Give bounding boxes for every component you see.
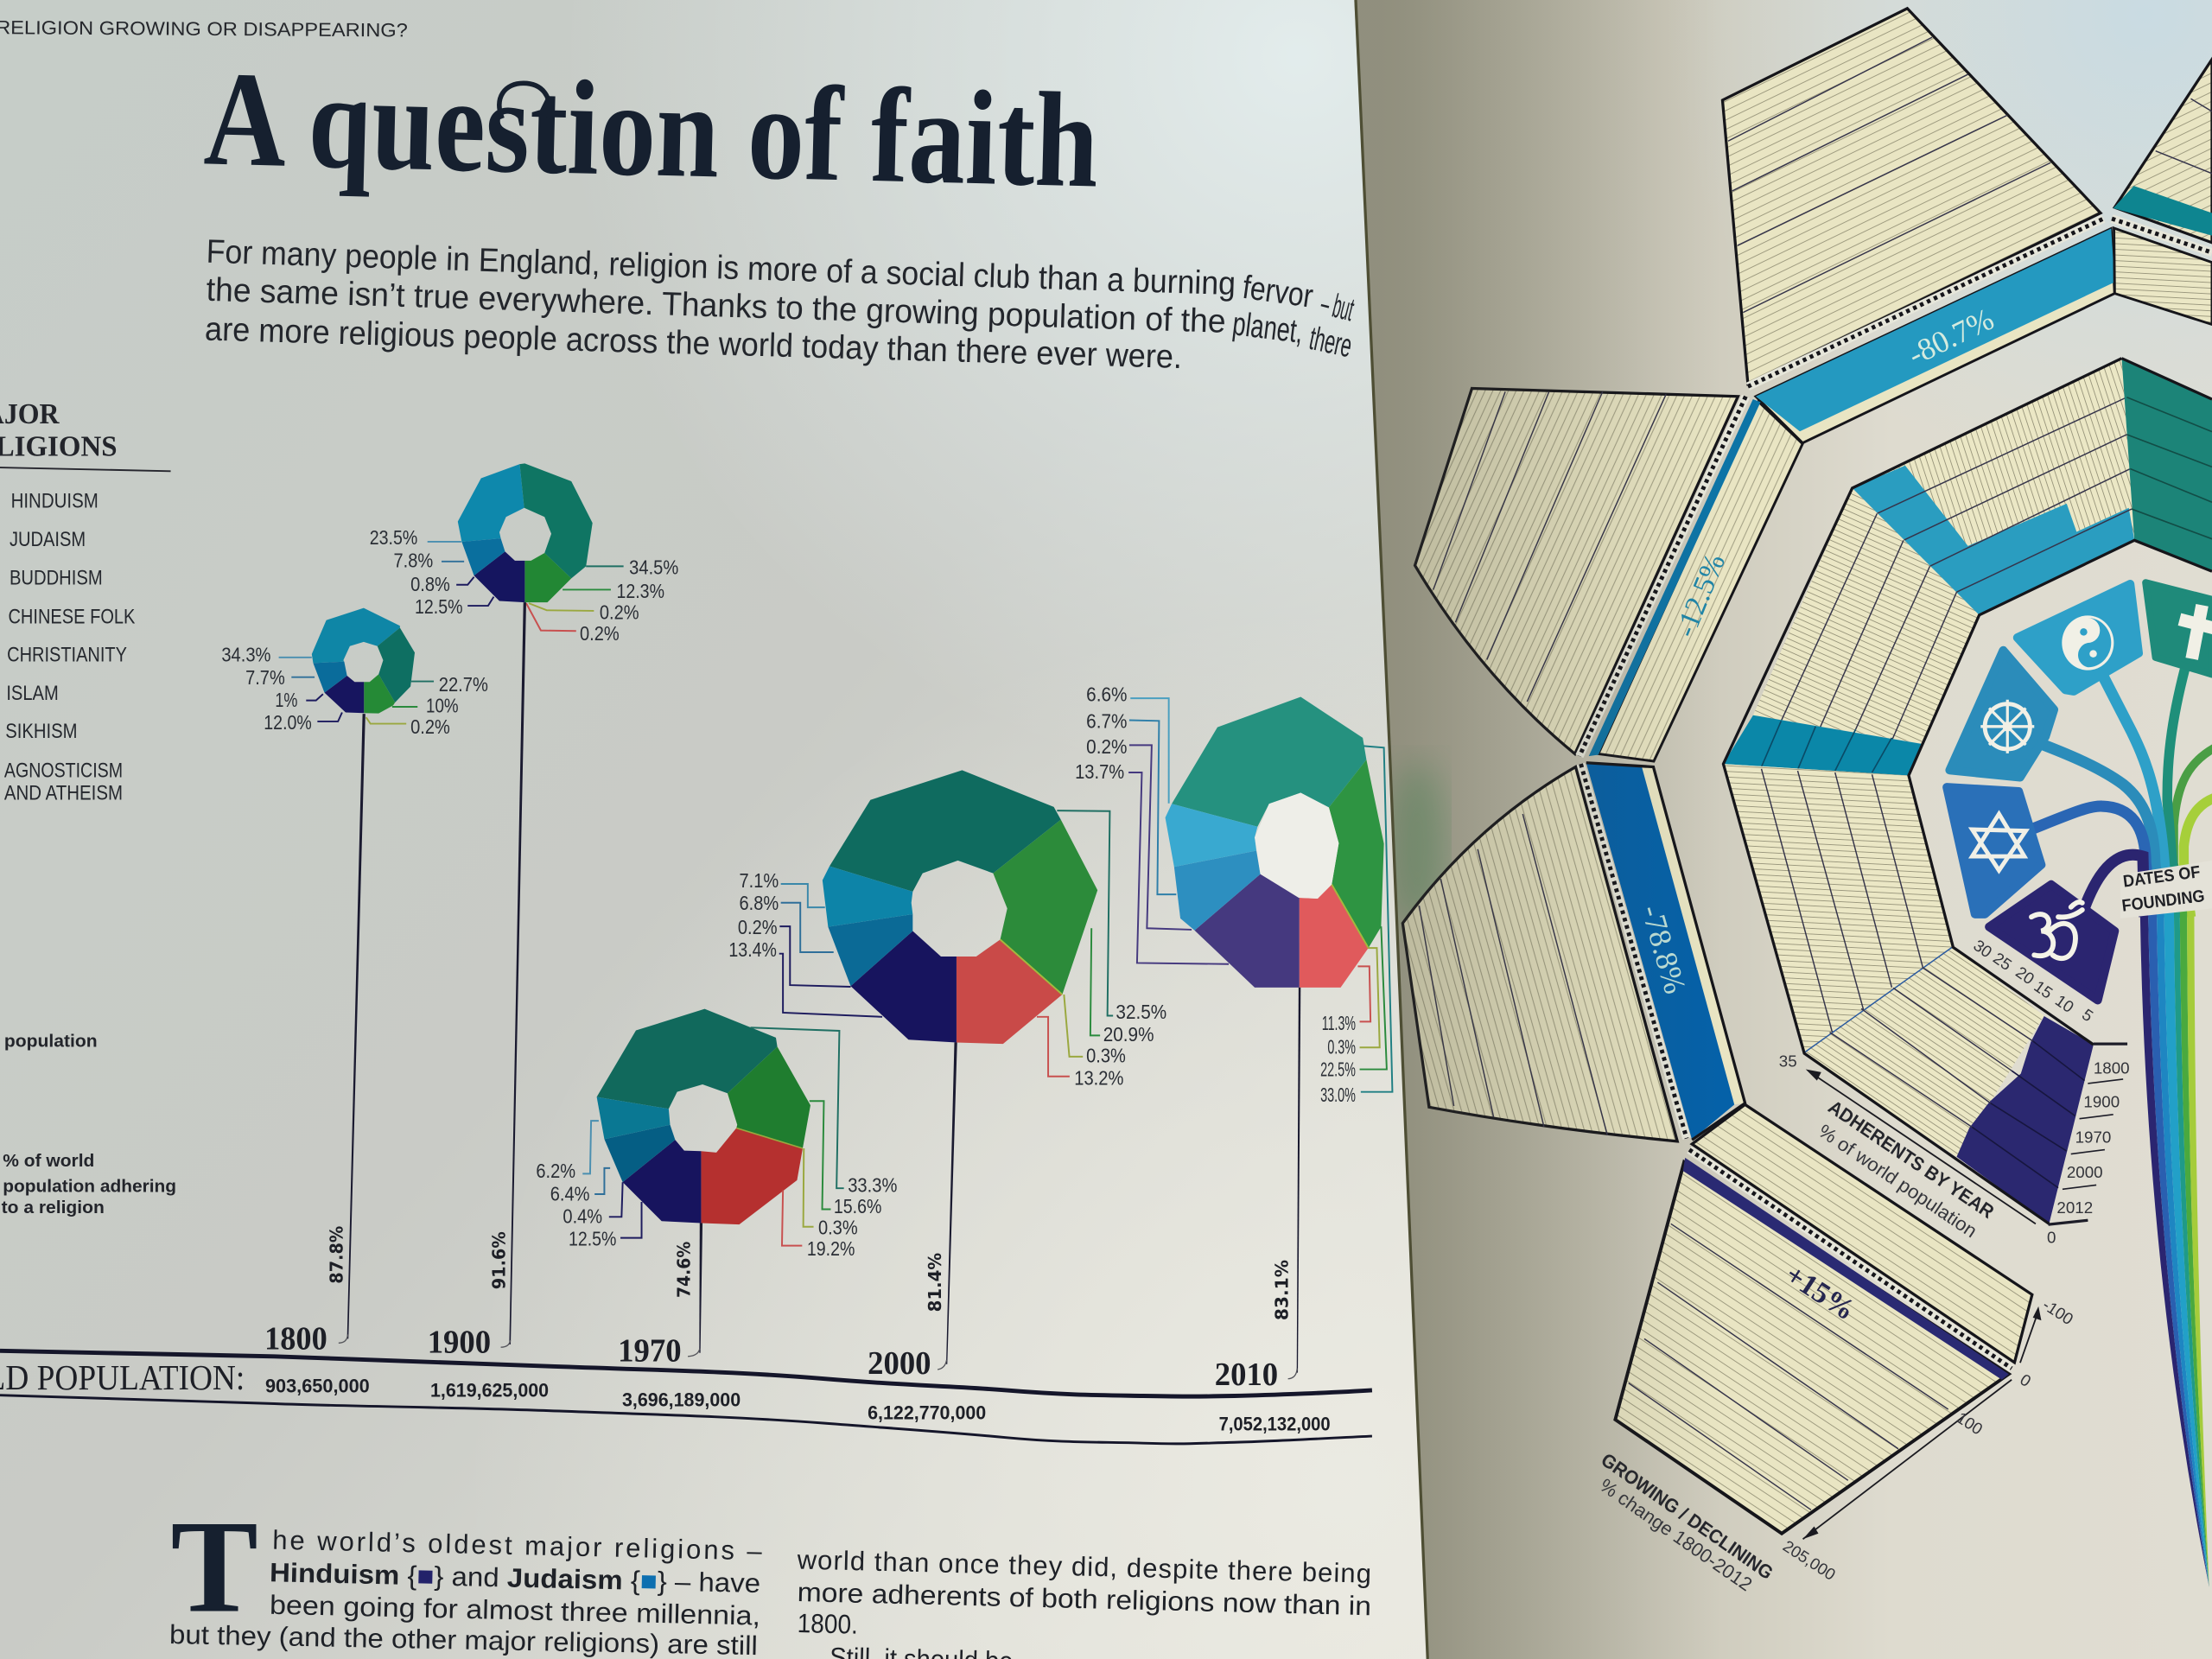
axis labels: adherents by year: 10 [2052,991,2077,1016]
axis labels: adherents by year: 20 [2012,963,2037,988]
chart: donut 2000: 0.3% [1086,1044,1126,1066]
chart: donut 1800: 22.7% [439,673,488,696]
axis labels: growing / declining: % change 1800-2012 [1596,1474,1756,1595]
label: dates of founding: FOUNDING [2120,887,2206,916]
icon tag: yin yang (Chinese folk) [2018,584,2139,691]
legend: major religions: CHRISTIANITY [7,645,127,667]
chart: donut 1800: 12.0% [264,711,312,734]
chart: donut 1970: 15.6% [834,1195,881,1217]
stems with percent labels: 74.6% [673,1242,694,1298]
chart: donut 1900: 34.5% [629,556,678,578]
stems with percent labels: 87.8% [327,1226,347,1284]
body text column 1 [169,1493,763,1659]
legend: major religions [0,398,171,805]
body text column 2: 1800. [797,1608,858,1640]
chart: donut 1970: 6.4% [550,1182,589,1205]
intro text: For many people in England, religion is more of a social club than a burning [206,233,1236,302]
axis labels: adherents by year [1779,936,2130,1246]
world population figures [0,1359,1331,1435]
body text column 1: been going for almost three millennia, [270,1590,760,1631]
chart: donut 1970 [536,1009,897,1260]
label: -78.8%: -78.8% [1635,901,1693,997]
chart: donut 1900: 0.2% [580,622,620,645]
chart: donut 2010 [1075,683,1392,1106]
axis labels: growing / declining: 0 [2017,1370,2034,1390]
chart: donut 2010: 6.7% [1086,709,1127,732]
stems with percent labels: 91.6% [488,1231,509,1289]
intro text: there [1306,320,1355,365]
world population figures: 903,650,000 [265,1375,370,1396]
icon tag: cross (Christianity) [2145,582,2212,674]
legend: major religions: SIKHISM [5,721,77,743]
chart: donut 2010: 0.3% [1327,1036,1356,1058]
axis labels: adherents by year: 0 [2047,1228,2056,1246]
chart: donut 2000: 13.2% [1074,1067,1123,1090]
axis labels: growing / declining [1596,1295,2076,1595]
intro text: – but [1317,284,1357,328]
axis labels: adherents by year: 2012 [2056,1198,2093,1217]
legend: major religions: BUDDHISM [10,568,103,590]
axis labels: adherents by year: 25 [1990,949,2015,974]
chart: donut 2000: 0.2% [738,916,778,938]
chart: donut 1800: 10% [426,694,459,716]
chart: donut 1970: 0.3% [818,1217,858,1239]
timeline: year labels: 1970 [618,1334,682,1370]
chart: donut 2010: 33.0% [1320,1084,1356,1106]
chart: donut 1900: 7.8% [394,549,433,571]
intro text: are more religious people across the world today than there ever were. [204,310,1183,376]
chart: donut 1970: 0.4% [563,1205,602,1228]
side note: population: population [4,1032,98,1051]
title: A question of faith [202,42,1100,216]
world population figures: 6,122,770,000 [868,1402,986,1423]
legend: major religions: CHINESE FOLK [8,607,136,629]
timeline: year labels: 1800 [264,1322,327,1357]
right page background [1340,0,2212,1659]
chart: donut 2010: 22.5% [1320,1058,1356,1081]
chart: donut 1800: 7.7% [245,666,285,689]
legend: major religions: ISLAM [6,683,59,705]
panel: bottom growth chart (Hinduism) [1615,1104,2032,1534]
chart: donut 1800 [221,608,488,738]
section: Chinese folk top [1853,359,2212,615]
chart: donut 1900 [370,463,678,645]
chart: donut 1970: 33.3% [848,1174,897,1197]
world population figures: 3,696,189,000 [622,1389,741,1411]
chart: donut 2010: 6.6% [1086,683,1127,705]
spine shading [1340,0,2212,1659]
chart: donut 1800: 1% [275,689,297,711]
axis labels: adherents by year: ADHERENTS BY YEAR [1824,1096,1998,1223]
chart: donut 1800: 34.3% [221,644,270,666]
intro text: planet, [1230,305,1305,351]
axis labels: adherents by year: 1970 [2075,1128,2111,1146]
side note: percent adhering: population adhering [3,1178,176,1197]
icon tag: dharma wheel (Buddhism) [1949,651,2054,778]
legend: major religions: AGNOSTICISM [4,760,123,783]
label: +15%: +15% [1779,1258,1861,1327]
intro text: fervor [1240,269,1315,315]
axis labels: growing / declining: -100 [2039,1295,2076,1328]
icon tag: om (Hinduism) [1989,885,2114,1001]
body text column 2 [796,1544,1371,1659]
body text column 2: world than once they did, despite there being [796,1544,1371,1589]
stems with percent labels [327,602,1300,1379]
icon tag: star of David (Judaism) [1947,787,2041,914]
panel: right page growth chart (top right, Christianity) [2112,60,2212,325]
intro text: the same isn’t true everywhere. Thanks to the growing population of the [206,271,1226,340]
world population figures: 1,619,625,000 [430,1379,549,1401]
body text column 1: he world’s oldest major religions – [272,1525,763,1567]
panel: left upper growth chart (Buddhism) [1415,388,1802,761]
side note: percent adhering: to a religion [2,1198,105,1217]
label: dates of founding [2120,861,2212,918]
body text column 1: T [171,1493,258,1640]
chart: donut 2000 [728,770,1166,1090]
panel: left lower growth chart (Judaism) [1402,763,1745,1141]
chart: donut 2010: 13.7% [1075,760,1124,783]
chart: donut 1900: 0.2% [600,601,639,624]
side note: percent adhering [2,1152,176,1217]
chart: donut 2000: 32.5% [1116,1001,1166,1023]
axis labels: adherents by year: 5 [2079,1005,2096,1025]
running header: RELIGION GROWING OR DISAPPEARING? [0,16,408,41]
label: -12.5%: -12.5% [1669,550,1732,642]
timeline: year labels: 2000 [868,1346,931,1382]
body text column 1: Hinduism {■} and Judaism {■} – have [270,1557,760,1599]
panel: right page growth chart (Chinese folk, top) [1722,9,2114,443]
stems with percent labels: 83.1% [1272,1260,1293,1320]
axis labels: adherents by year: 2000 [2067,1163,2103,1181]
chart: donut 1900: 23.5% [370,526,417,549]
left page background [0,0,1427,1659]
legend: major religions: JUDAISM [10,529,86,551]
stems with percent labels: 81.4% [925,1253,945,1312]
chart: donut 1970: 19.2% [807,1237,855,1260]
chart: donut 1800: 0.2% [410,715,450,738]
timeline: year labels: 2010 [1215,1357,1278,1393]
label: -80.7%: -80.7% [1903,302,1999,372]
label: dates of founding: DATES OF [2122,862,2202,892]
chart: donut 2000: 6.8% [740,892,779,914]
chart: donut 2000: 20.9% [1103,1023,1154,1046]
world population figures: 7,052,132,000 [1219,1414,1331,1435]
timeline: wavy population band [0,1351,1372,1444]
axis labels: growing / declining: 100 [1954,1408,1986,1438]
axis labels: adherents by year: 15 [2031,977,2056,1002]
side note: percent adhering: % of world [3,1152,94,1171]
panel: adherents by year, inner ring chart [1723,359,2212,1224]
axis labels: adherents by year: 30 [1970,936,1995,961]
dates of founding: colored stems and stripes [2020,652,2212,1587]
axis labels: adherents by year: 1800 [2094,1058,2130,1077]
chart: donut 1900: 0.8% [410,573,450,595]
chart: donut 2010: 11.3% [1322,1012,1356,1034]
chart: donut 1900: 12.3% [616,580,664,602]
timeline: year labels [264,1322,1278,1393]
timeline: year labels: 1900 [428,1325,491,1361]
body text column 1: but they (and the other major religions) are still [169,1619,758,1659]
axis labels: growing / declining: 205,000 [1780,1536,1839,1584]
chart: donut 2000: 7.1% [740,869,779,892]
legend: major religions: HINDUISM [11,491,99,513]
chart: donut 1970: 6.2% [536,1160,575,1182]
intro text [204,233,1357,376]
axis labels: growing / declining: GROWING / DECLINING [1598,1449,1777,1584]
legend: major religions: AND ATHEISM [4,783,123,805]
chart: donut 1900: 12.5% [415,595,463,618]
axis labels: adherents by year: 35 [1779,1052,1797,1070]
axis labels: adherents by year: % of world population [1815,1120,1981,1242]
chart: donut 2000: 13.4% [728,938,777,961]
chart: donut 2010: 0.2% [1086,735,1127,758]
body text column 2: more adherents of both religions now than in [797,1577,1371,1621]
axis labels: adherents by year: 1900 [2083,1093,2120,1111]
chart: donut 1970: 12.5% [569,1228,616,1250]
